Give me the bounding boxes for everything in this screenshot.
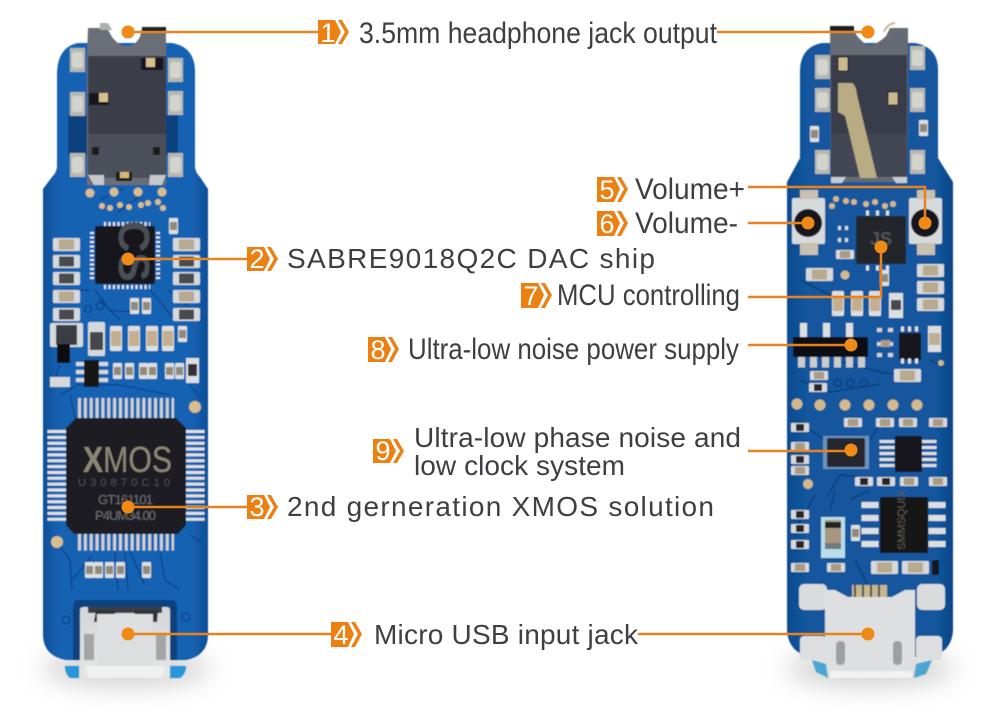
XMOS chip: GT161101 [98, 492, 153, 507]
callout 5: Volume+ [597, 173, 932, 230]
right capacitor column [169, 218, 200, 321]
board outline [787, 43, 953, 657]
callout 1: 3.5mm headphone jack output: 1 [320, 18, 336, 48]
callout 7: MCU controlling [521, 240, 888, 312]
power passives row [50, 298, 187, 363]
callout 4: Micro USB input jack: Micro USB input jack [374, 619, 639, 650]
MCU chip [836, 213, 906, 268]
floor shadow: left board [42, 650, 210, 686]
capacitor cluster [806, 264, 944, 318]
test pads [792, 196, 944, 489]
LED indicator [821, 517, 845, 558]
small component row [791, 418, 947, 475]
scattered passives [791, 477, 947, 575]
callout 4: Micro USB input jack: 4 [333, 620, 349, 650]
blue tabs [65, 666, 186, 678]
micro USB socket back [799, 584, 945, 678]
callout 8: Ultra-low noise power supply: Ultra-low noise power supply [408, 333, 739, 366]
DAC chip: CS [109, 220, 158, 282]
copper traces [795, 280, 945, 590]
callout 2: DAC chip: 2 [249, 244, 265, 274]
floor shadow: right board [786, 650, 954, 686]
left capacitor column [53, 238, 80, 321]
board outline [43, 43, 208, 660]
DAC chip [92, 220, 158, 287]
jack solder pads [70, 48, 183, 177]
callout 1: 3.5mm headphone jack output [122, 17, 874, 50]
clock oscillator [823, 436, 869, 469]
small jack-side resistors [810, 120, 928, 142]
XMOS chip [57, 408, 195, 542]
clock driver chip [887, 436, 929, 472]
callout 3: XMOS solution: 3 [249, 492, 265, 522]
power regulator chip [793, 330, 868, 362]
copper traces [52, 188, 205, 624]
callout 9: Ultra-low phase noise and low clock system: Ultra-low phase noise and [414, 422, 741, 453]
callout 5: Volume+: 5 [599, 175, 615, 205]
XMOS chip: P4UM34.00 [95, 508, 156, 523]
callout 2: DAC chip [122, 243, 655, 274]
panel: left circuit board (front) [43, 23, 208, 678]
callout 6: Volume-: Volume- [635, 207, 738, 240]
flash chip: SMMSQUIX [896, 489, 908, 550]
callout 9: Ultra-low phase noise and low clock system: 9 [375, 436, 391, 466]
headphone jack [87, 23, 166, 185]
MCU chip: JS [870, 229, 892, 249]
callout 8: Ultra-low noise power supply: 8 [370, 335, 386, 365]
callout 7: MCU controlling: 7 [523, 281, 539, 311]
XMOS chip: U30870C10 [78, 477, 170, 489]
flash chip [870, 489, 937, 553]
callout 9: Ultra-low phase noise and low clock system [373, 422, 858, 481]
regulator side parts [809, 326, 941, 392]
test points and vias [51, 188, 201, 548]
jack side shadows [68, 115, 88, 155]
callout 3: XMOS solution: 2nd gerneration XMOS solution [287, 491, 714, 522]
volume minus button [792, 190, 825, 255]
small signal components row [50, 358, 199, 387]
XMOS chip: XMOS [83, 439, 172, 480]
callout 1: 3.5mm headphone jack output: 3.5mm headphone jack output [359, 17, 718, 50]
callout 5: Volume+: Volume+ [635, 173, 745, 206]
callout 7: MCU controlling: MCU controlling [557, 279, 740, 312]
callout 6: Volume- [597, 207, 814, 240]
micro USB socket [73, 600, 177, 678]
callout 2: DAC chip: SABRE9018Q2C DAC ship [287, 243, 655, 274]
jack solder pads [815, 46, 925, 174]
lower resistors [85, 562, 151, 578]
callout 9: Ultra-low phase noise and low clock system: low clock system [414, 450, 625, 481]
headphone jack [830, 23, 908, 183]
callout 4: Micro USB input jack [122, 619, 874, 650]
volume plus button [909, 190, 942, 255]
panel: right circuit board (back) [787, 23, 953, 678]
callout 6: Volume-: 6 [599, 209, 615, 239]
